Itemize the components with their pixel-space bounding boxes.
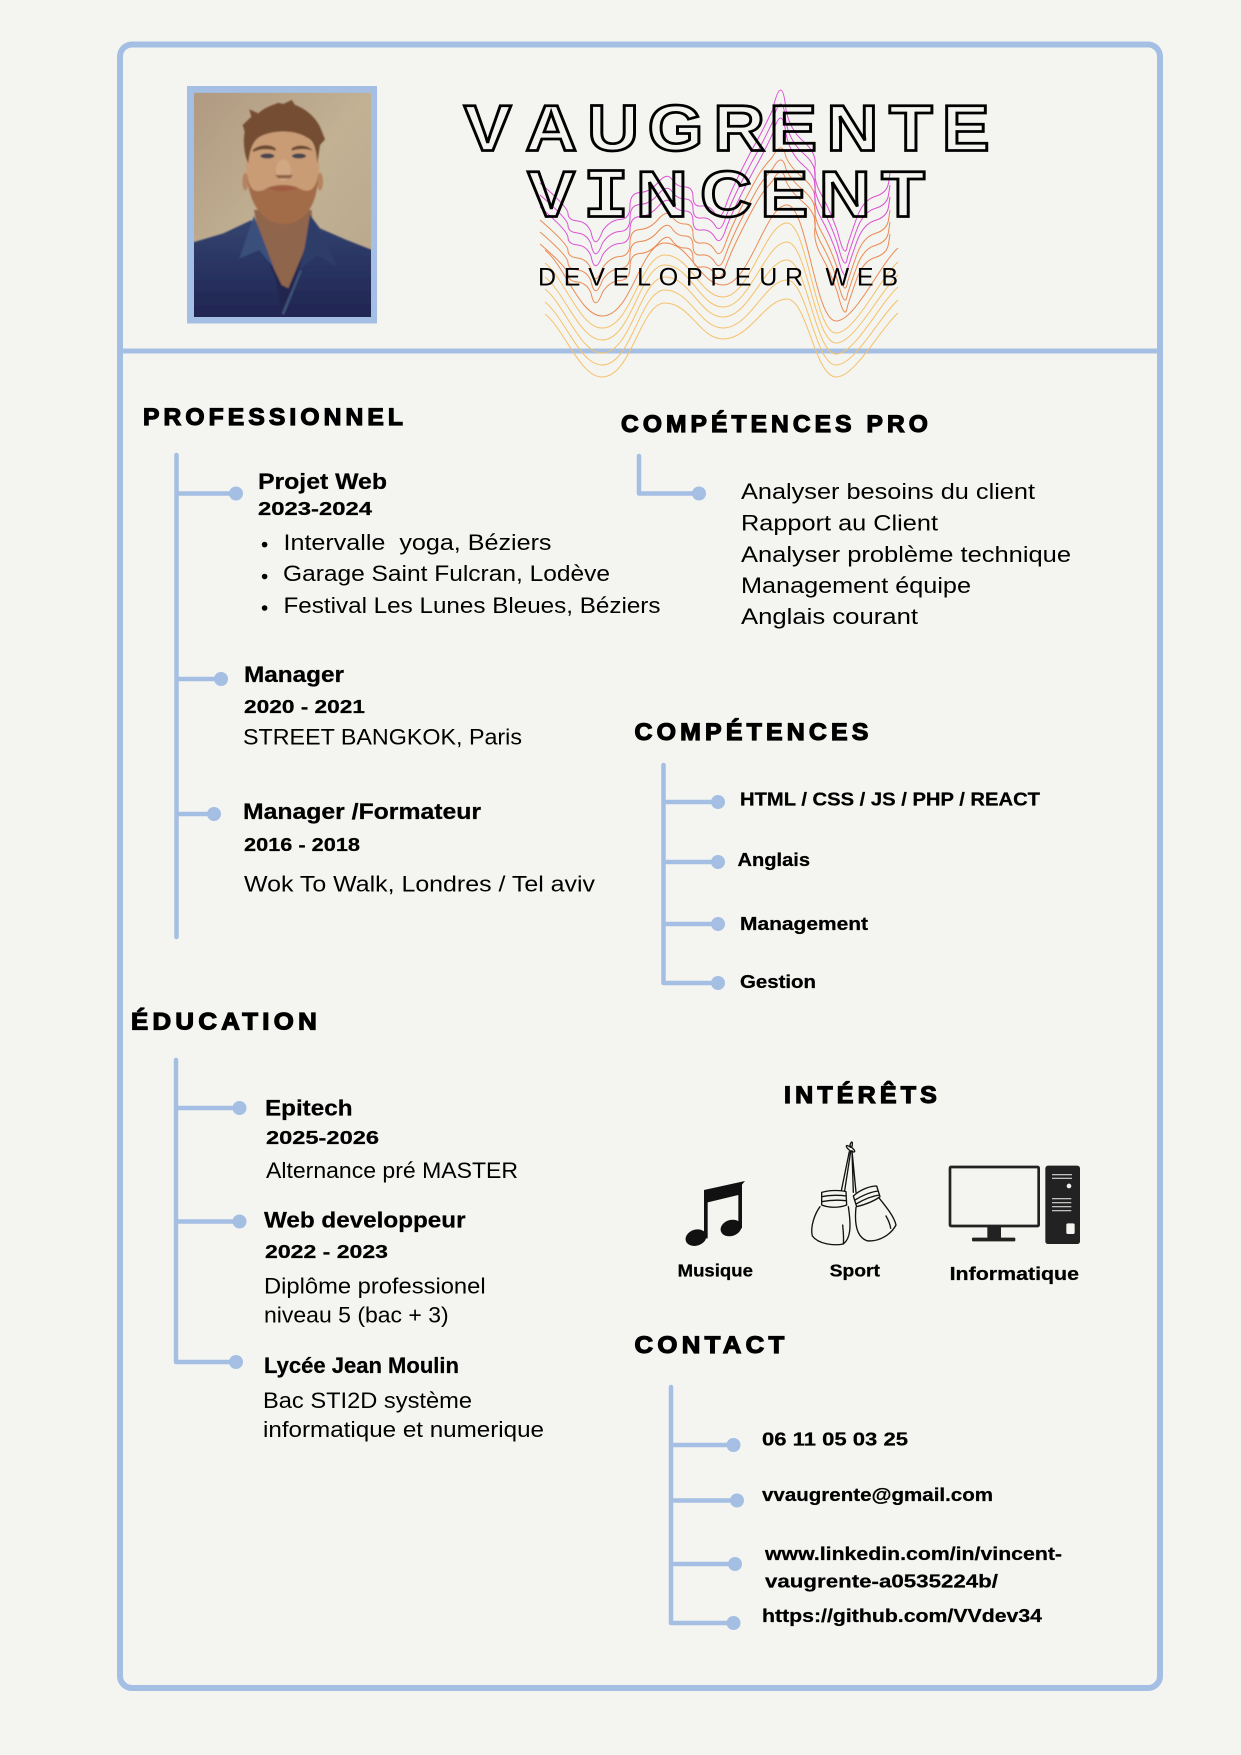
timeline: éducation xyxy=(176,1060,246,1369)
contact details: 06 11 05 03 25 xyxy=(762,1429,908,1450)
panel: professionnel xyxy=(143,404,660,937)
entry: Projet Web: Garage Saint Fulcran, Lodève xyxy=(283,561,610,586)
entry: Manager /Formateur: Wok To Walk, Londres / Tel aviv xyxy=(244,872,596,896)
panel: intérêts xyxy=(678,1081,1080,1284)
entry: Manager: STREET BANGKOK, Paris xyxy=(243,724,522,750)
contact details xyxy=(762,1429,1062,1626)
title: VAUGRENTE VINCENT: T xyxy=(881,158,925,231)
heading: contact: CONTACT xyxy=(634,1332,788,1359)
entry: Lycée Jean Moulin: Bac STI2D système xyxy=(263,1388,472,1413)
skills list: Gestion xyxy=(740,971,816,992)
panel: éducation xyxy=(131,1008,544,1442)
title: VAUGRENTE VINCENT: I xyxy=(583,159,629,238)
timeline: professionnel xyxy=(176,455,243,937)
entry: Manager /Formateur: Manager /Formateur xyxy=(243,799,481,824)
contact details: https://github.com/VVdev34 xyxy=(762,1605,1043,1626)
skills list: HTML / CSS / JS / PHP / REACT xyxy=(740,789,1041,810)
label: Sport: Sport xyxy=(830,1261,880,1281)
panel: compétences xyxy=(634,718,1041,992)
icon: boxing gloves xyxy=(812,1142,896,1245)
entry: Web developpeur: 2022 - 2023 xyxy=(265,1241,388,1262)
title: VAUGRENTE VINCENT xyxy=(464,92,990,238)
timeline: compétences xyxy=(664,765,725,990)
skills list: Management xyxy=(740,913,868,934)
entry: Manager /Formateur: 2016 - 2018 xyxy=(244,834,360,855)
entry: Web developpeur: niveau 5 (bac + 3) xyxy=(264,1303,449,1328)
page frame xyxy=(120,44,1160,1688)
subtitle: job title: DEVELOPPEUR WEB xyxy=(538,264,898,292)
entry: Web developpeur: Web developpeur xyxy=(264,1208,466,1232)
contact details: www.linkedin.com/in/vincent- xyxy=(764,1543,1062,1564)
list: compétences pro: Analyser problème technique xyxy=(741,542,1071,567)
list: compétences pro: Analyser besoins du client xyxy=(741,479,1036,504)
heading: compétences: COMPÉTENCES xyxy=(634,718,872,746)
entry: Projet Web: Festival Les Lunes Bleues, Béziers xyxy=(284,593,660,618)
list: compétences pro xyxy=(741,479,1071,629)
entry: Projet Web: 2023-2024 xyxy=(258,498,373,519)
entry: Projet Web: Projet Web xyxy=(258,469,387,494)
heading: professionnel: PROFESSIONNEL xyxy=(143,404,407,431)
entry: Epitech: 2025-2026 xyxy=(266,1127,379,1148)
list: compétences pro: Management équipe xyxy=(741,573,971,598)
label: Informatique: Informatique xyxy=(950,1263,1079,1284)
connector: compétences pro xyxy=(639,456,706,500)
photo: portrait xyxy=(187,86,377,324)
entry: Manager xyxy=(243,662,522,750)
icon: desktop computer xyxy=(950,1166,1080,1244)
header divider xyxy=(120,348,1160,354)
skills list xyxy=(738,789,1041,992)
entry: Projet Web: Intervalle yoga, Béziers xyxy=(284,530,552,555)
timeline: contact xyxy=(671,1387,744,1630)
entry: Manager /Formateur xyxy=(243,799,596,896)
title: VAUGRENTE VINCENT: C xyxy=(700,158,752,231)
heading: éducation: ÉDUCATION xyxy=(131,1008,321,1036)
panel: compétences pro xyxy=(621,410,1071,629)
entry: Lycée Jean Moulin: informatique et numerique xyxy=(263,1417,544,1442)
title: VAUGRENTE VINCENT: N xyxy=(819,158,871,231)
entry: Projet Web xyxy=(258,469,660,618)
contact details: vaugrente-a0535224b/ xyxy=(765,1571,998,1592)
heading: compétences pro: COMPÉTENCES PRO xyxy=(621,410,932,438)
heading: intérêts: INTÉRÊTS xyxy=(784,1081,941,1109)
entry: Epitech xyxy=(265,1096,518,1183)
skills list: Anglais xyxy=(738,849,810,870)
entry: Lycée Jean Moulin xyxy=(263,1353,544,1442)
title: VAUGRENTE VINCENT: V xyxy=(527,158,575,231)
decorative sound-wave lines xyxy=(540,90,898,377)
entry: Web developpeur: Diplôme professionel xyxy=(264,1274,486,1298)
entry: Lycée Jean Moulin: Lycée Jean Moulin xyxy=(264,1353,459,1378)
entry: Manager: 2020 - 2021 xyxy=(244,696,365,717)
title: VAUGRENTE VINCENT: E xyxy=(760,158,808,231)
entry: Epitech: Alternance pré MASTER xyxy=(266,1158,518,1183)
list: compétences pro: Anglais courant xyxy=(741,604,919,629)
title: VAUGRENTE VINCENT: VAUGRENTE xyxy=(464,92,990,165)
list: compétences pro: Rapport au Client xyxy=(741,510,939,536)
contact details: vvaugrente@gmail.com xyxy=(762,1484,993,1505)
entry: Manager: Manager xyxy=(244,662,344,687)
icon: music notes xyxy=(683,1181,745,1249)
entry: Web developpeur xyxy=(264,1208,486,1328)
panel: contact xyxy=(634,1332,1062,1630)
title: VAUGRENTE VINCENT: N xyxy=(636,158,688,231)
label: Musique: Musique xyxy=(678,1261,753,1281)
entry: Epitech: Epitech xyxy=(265,1096,352,1120)
